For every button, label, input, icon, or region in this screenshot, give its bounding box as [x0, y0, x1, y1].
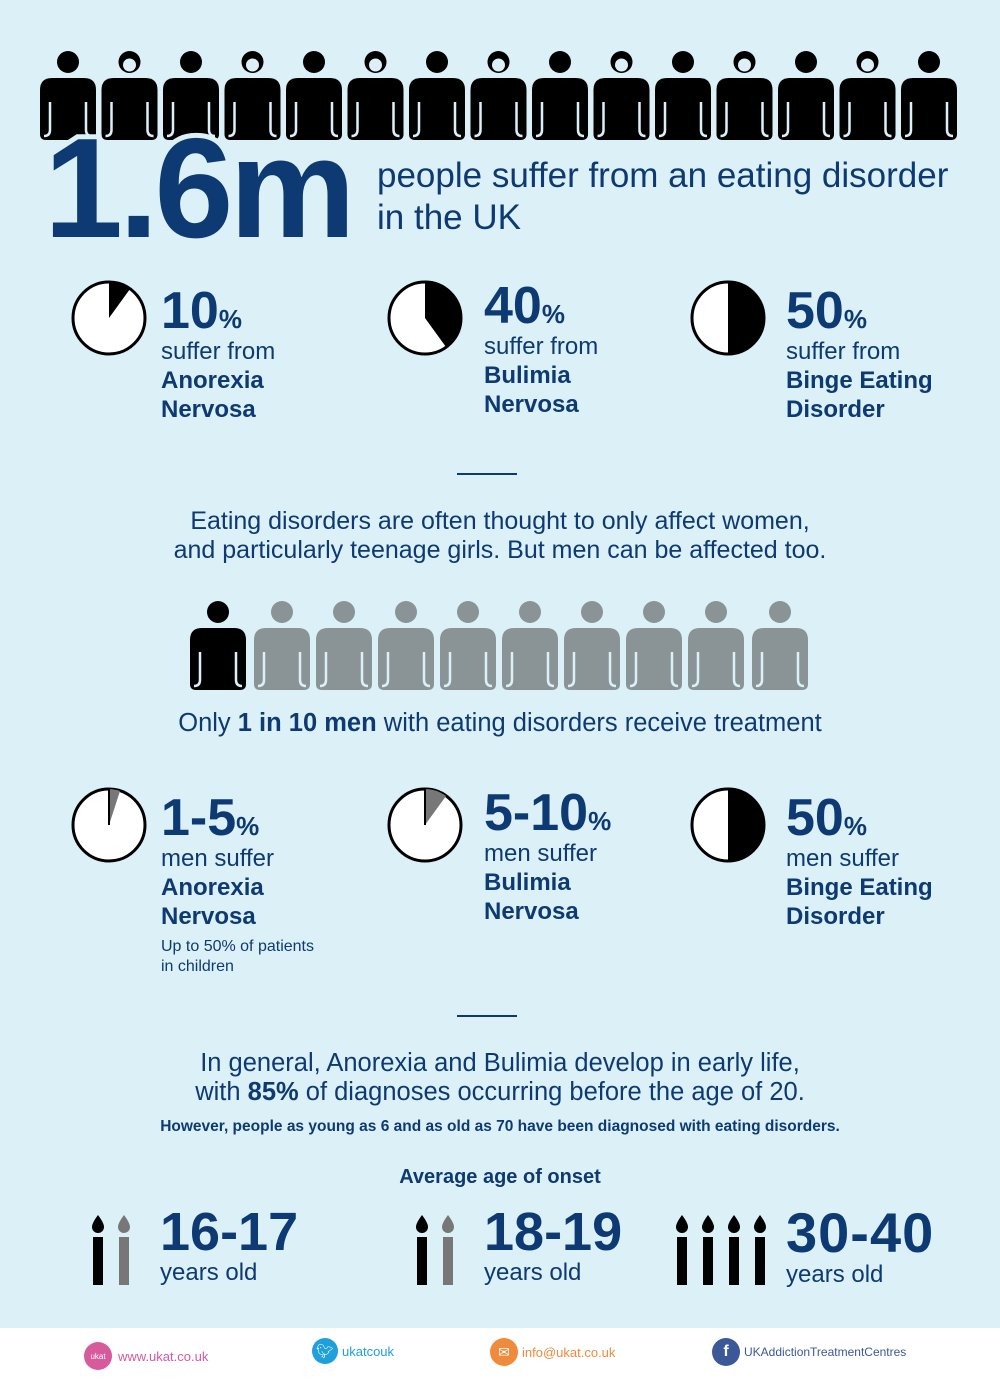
stat men anorexia: men suffer — [161, 845, 274, 872]
stat anorexia: 10% — [161, 282, 242, 340]
footer: email: info@ukat.co.uk — [522, 1344, 615, 1360]
stat men bulimia: Nervosa — [484, 898, 579, 925]
stat men anorexia: 1-5% — [161, 789, 259, 847]
footer: twitter: 🐦︎ — [316, 1342, 334, 1358]
pie 10% — [72, 280, 146, 356]
onset 30-40: 30-40 — [786, 1201, 934, 1264]
stat bulimia: suffer from — [484, 333, 598, 360]
onset 30-40 — [676, 1201, 934, 1288]
pie 1-5% — [72, 788, 146, 862]
stat men anorexia — [161, 789, 314, 975]
stat bulimia: Nervosa — [484, 391, 579, 418]
stat anorexia — [161, 282, 275, 423]
stat men anorexia: Anorexia — [161, 874, 264, 901]
footer: website: www.ukat.co.uk — [118, 1348, 208, 1364]
footer: email: ✉ — [498, 1344, 510, 1360]
intro text men: and particularly teenage girls. But men can be affected too. — [174, 536, 826, 564]
onset heading: Average age of onset — [399, 1166, 601, 1188]
onset 16-17: years old — [160, 1259, 257, 1286]
age text: In general, Anorexia and Bulimia develop in early life, — [200, 1049, 800, 1077]
onset 16-17: 16-17 — [160, 1202, 298, 1262]
onset 18-19 — [416, 1202, 622, 1286]
footer: facebook — [712, 1338, 906, 1366]
age text — [195, 1049, 805, 1106]
headline text: people suffer from an eating disorder — [377, 156, 948, 195]
treatment caption: Only 1 in 10 men with eating disorders receive treatment — [178, 709, 822, 737]
stat men binge: men suffer — [786, 845, 899, 872]
icon: candles — [92, 1215, 130, 1285]
stat men anorexia: in children — [161, 958, 234, 975]
footer — [0, 1328, 1000, 1381]
stat binge — [786, 282, 933, 423]
stat binge: 50% — [786, 282, 867, 340]
footer: website — [84, 1342, 208, 1370]
stat bulimia: 40% — [484, 277, 565, 335]
stat bulimia — [484, 277, 598, 418]
stat binge: suffer from — [786, 338, 900, 365]
pie 50% men — [690, 788, 766, 862]
stat men bulimia — [484, 784, 611, 925]
age small note: However, people as young as 6 and as old as 70 have been diagnosed with eating disorders. — [160, 1118, 840, 1135]
people row men — [190, 601, 808, 690]
footer: twitter: ukatcouk — [342, 1344, 394, 1358]
footer: website: ukat — [90, 1352, 106, 1360]
stat binge: Disorder — [786, 396, 885, 423]
people row top — [40, 51, 957, 140]
stat anorexia: Anorexia — [161, 367, 264, 394]
stat men bulimia: 5-10% — [484, 784, 611, 842]
intro text men: Eating disorders are often thought to only affect women, — [190, 507, 810, 535]
stat anorexia: suffer from — [161, 338, 275, 365]
pie 5-10% — [388, 788, 462, 862]
footer: email — [490, 1338, 616, 1366]
stat men bulimia: Bulimia — [484, 869, 571, 896]
icon: candles — [416, 1215, 454, 1285]
stat men anorexia: Up to 50% of patients — [161, 938, 314, 955]
stat anorexia: Nervosa — [161, 396, 256, 423]
footer: facebook: UKAddictionTreatmentCentres — [744, 1345, 906, 1359]
intro text men — [174, 507, 826, 564]
onset 30-40: years old — [786, 1261, 883, 1288]
stat row 1 — [72, 277, 933, 423]
stat men binge: Binge Eating — [786, 874, 933, 901]
footer: facebook: f — [723, 1343, 729, 1360]
icon: candles — [676, 1215, 766, 1285]
stat binge: Binge Eating — [786, 367, 933, 394]
big number 1.6m: 1.6m — [44, 109, 352, 268]
stat men binge: Disorder — [786, 903, 885, 930]
pie 40% — [388, 280, 462, 356]
pie 50% — [690, 280, 766, 356]
stat bulimia: Bulimia — [484, 362, 571, 389]
footer: twitter — [312, 1338, 394, 1364]
stat row 2 — [72, 784, 933, 975]
stat men binge: 50% — [786, 789, 867, 847]
age text: with 85% of diagnoses occurring before the age of 20. — [195, 1078, 805, 1106]
onset 16-17 — [92, 1202, 298, 1286]
stat men bulimia: men suffer — [484, 840, 597, 867]
stat men anorexia: Nervosa — [161, 903, 256, 930]
headline text — [377, 156, 948, 237]
stat men binge — [786, 789, 933, 930]
headline text: in the UK — [377, 198, 521, 237]
onset 18-19: years old — [484, 1259, 581, 1286]
onset 18-19: 18-19 — [484, 1202, 622, 1262]
